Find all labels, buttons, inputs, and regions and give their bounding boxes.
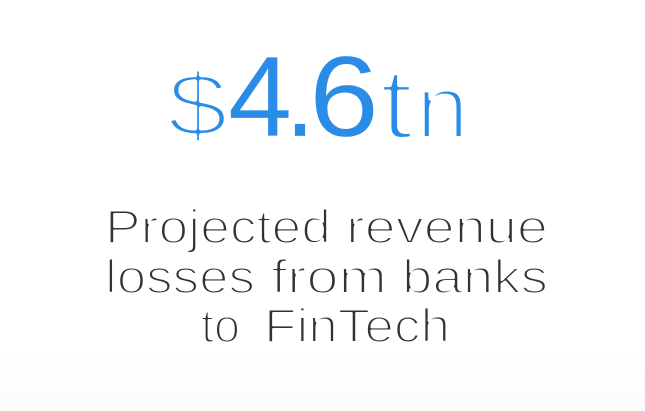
caption: projected revenue losses [105,200,548,352]
caption: projected revenue losses: from [271,250,387,303]
figure: $4.6tn: 6 [309,34,379,161]
figure: $4.6tn: n [416,58,469,158]
figure: $4.6tn: 4 [228,34,292,161]
caption: projected revenue losses: banks [402,250,548,303]
caption: projected revenue losses: losses [105,250,255,303]
figure: $4.6tn: . [285,34,315,161]
caption: projected revenue losses: to [201,299,240,352]
caption: projected revenue losses: FinTech [264,299,450,352]
figure: $4.6tn [167,34,469,161]
caption: projected revenue losses: revenue [346,200,548,253]
caption: projected revenue losses: Projected [105,200,331,253]
figure: $4.6tn: t [380,48,413,160]
figure: $4.6tn: $ [167,56,228,156]
